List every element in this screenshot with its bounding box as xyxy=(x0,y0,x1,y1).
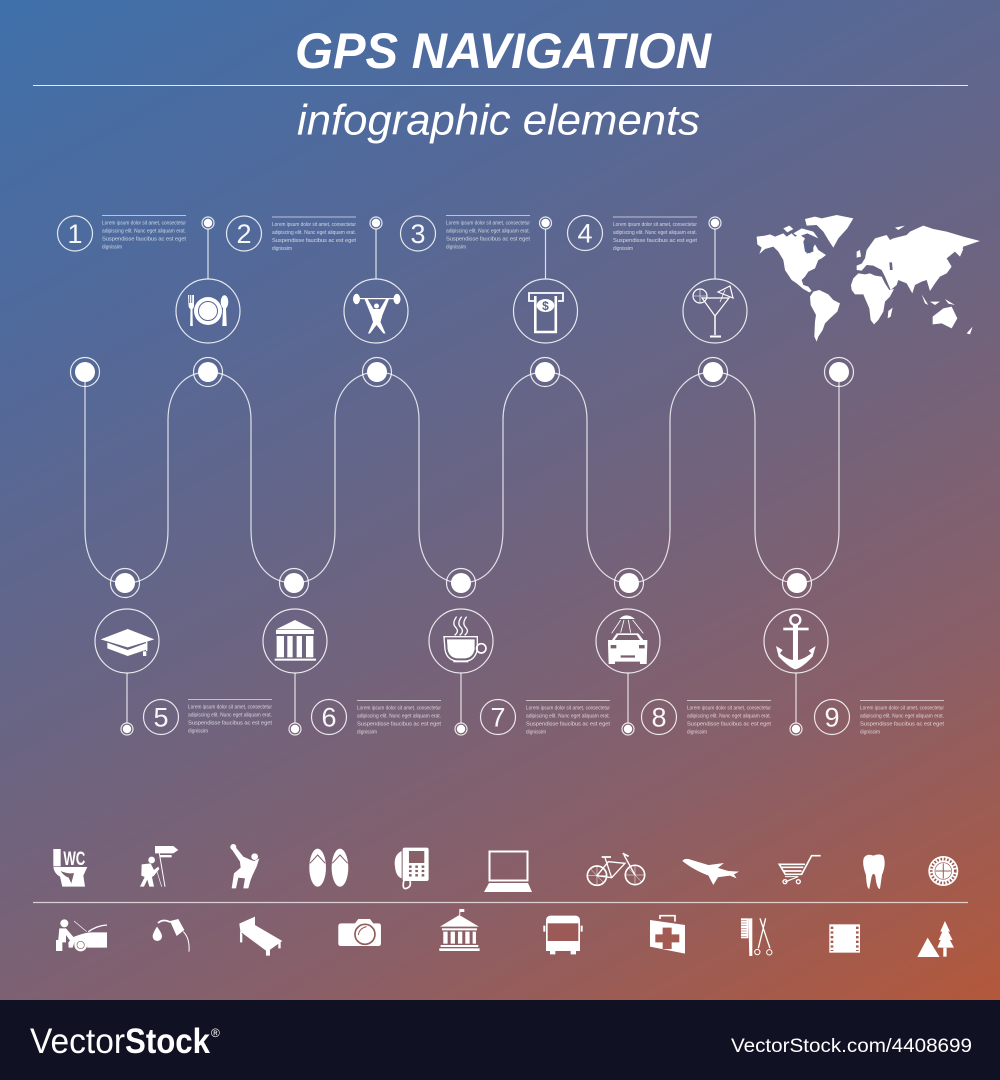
icon: first aid kit xyxy=(650,916,685,954)
connector: weights xyxy=(344,217,408,343)
step 6 text: Suspendisse faucibus ac est eget xyxy=(357,722,441,728)
step 8 number xyxy=(642,700,676,734)
icon: WC toilet xyxy=(53,849,87,887)
step 9 text: Suspendisse faucibus ac est eget xyxy=(860,722,944,728)
icon: comb and scissors xyxy=(741,918,772,956)
route nodes xyxy=(70,358,854,598)
connector: anchor xyxy=(764,609,828,735)
step 4 number xyxy=(568,216,602,250)
icon: atm cash: $ xyxy=(542,299,549,313)
icon: coffee cup xyxy=(444,617,486,662)
step 7 number: 7 xyxy=(490,702,506,732)
step 7 text xyxy=(526,700,610,736)
connector: bank xyxy=(263,609,327,735)
step 4 text: dignissim xyxy=(613,246,633,252)
step 4 text: Lorem ipsum dolor sit amet, consectetur xyxy=(613,222,697,228)
step 2 text xyxy=(272,217,356,252)
route line xyxy=(85,372,839,583)
step 4 text: adipiscing elit. Nunc eget aliquam erat. xyxy=(613,230,697,236)
icon: bus xyxy=(543,916,583,954)
step 6 text: dignissim xyxy=(357,730,377,736)
step 5 number xyxy=(144,700,178,734)
icon: atm cash xyxy=(529,293,563,332)
step 6 text: adipiscing elit. Nunc eget aliquam erat. xyxy=(357,714,441,720)
step 1 number xyxy=(58,216,92,251)
step 8 text: dignissim xyxy=(687,730,707,736)
step 7 number xyxy=(480,700,516,734)
step 3 text: adipiscing elit. Nunc eget aliquam erat. xyxy=(446,229,530,235)
step 8 text: Suspendisse faucibus ac est eget xyxy=(687,722,771,728)
icon: roulette xyxy=(928,856,958,886)
step 7 text: Suspendisse faucibus ac est eget xyxy=(526,722,610,728)
step 7 text: dignissim xyxy=(526,730,546,736)
logo xyxy=(30,1022,220,1061)
step 9 number xyxy=(814,700,850,734)
step 2 text: Suspendisse faucibus ac est eget xyxy=(272,238,356,244)
step 6 number xyxy=(312,700,346,734)
step 3 number xyxy=(400,216,436,251)
icon: camera xyxy=(338,919,381,946)
world map xyxy=(757,215,980,342)
icon: WC toilet: WC xyxy=(63,849,85,870)
step 5 text: dignissim xyxy=(188,729,208,735)
step 9 text xyxy=(860,700,944,736)
step 1 number: 1 xyxy=(67,219,83,249)
icon: tent and tree xyxy=(917,921,954,957)
logo: ® xyxy=(211,1026,220,1040)
icon: museum building xyxy=(439,909,480,951)
subtitle: infographic elements xyxy=(297,96,700,144)
icon: hiker with signpost xyxy=(140,846,178,887)
image id: VectorStock.com/4408699 xyxy=(731,1036,972,1057)
step 5 number: 5 xyxy=(153,702,169,732)
connector: cocktail xyxy=(683,217,747,343)
step 1 text: adipiscing elit. Nunc eget aliquam erat. xyxy=(102,229,186,235)
logo: Stock xyxy=(125,1022,210,1061)
icon: car mechanic xyxy=(56,919,107,951)
icon: fuel nozzle xyxy=(153,919,189,952)
step 5 text xyxy=(188,700,272,735)
icon: laptop xyxy=(484,852,532,892)
icon: discus thrower xyxy=(230,844,259,888)
step 5 text: adipiscing elit. Nunc eget aliquam erat. xyxy=(188,713,272,719)
connector: plate xyxy=(176,217,240,343)
logo: Vector xyxy=(30,1022,125,1061)
step 9 text: Lorem ipsum dolor sit amet, consectetur xyxy=(860,706,944,712)
icon: cocktail xyxy=(693,286,733,336)
step 7 text: Lorem ipsum dolor sit amet, consectetur xyxy=(526,706,610,712)
step 2 text: dignissim xyxy=(272,246,292,252)
step 3 text: Lorem ipsum dolor sit amet, consectetur xyxy=(446,221,530,227)
icon: bed xyxy=(239,917,282,956)
step 9 text: dignissim xyxy=(860,730,880,736)
icon: bicycle xyxy=(587,853,645,885)
step 6 text: Lorem ipsum dolor sit amet, consectetur xyxy=(357,706,441,712)
step 9 number: 9 xyxy=(824,702,840,732)
step 6 number: 6 xyxy=(321,702,337,732)
step 8 text xyxy=(687,700,771,736)
icon: car wash xyxy=(608,615,647,664)
step 3 text xyxy=(446,216,530,251)
icon: anchor xyxy=(776,615,816,669)
footer band xyxy=(0,1000,1000,1080)
connector: coffee xyxy=(429,609,493,735)
step 4 text xyxy=(613,217,697,252)
step 8 text: adipiscing elit. Nunc eget aliquam erat. xyxy=(687,714,771,720)
step 4 text: Suspendisse faucibus ac est eget xyxy=(613,238,697,244)
icon: plate and cutlery xyxy=(188,295,228,326)
step 4 number: 4 xyxy=(577,218,593,248)
title: GPS NAVIGATION xyxy=(295,23,712,79)
step 1 text: Lorem ipsum dolor sit amet, consectetur xyxy=(102,221,186,227)
step 8 text: Lorem ipsum dolor sit amet, consectetur xyxy=(687,706,771,712)
icon: airplane xyxy=(682,859,739,885)
step 1 text: dignissim xyxy=(102,245,122,251)
icon: bank xyxy=(275,620,316,661)
step 3 number: 3 xyxy=(410,219,426,249)
connector: car wash xyxy=(596,609,660,735)
icon: flip flops xyxy=(309,849,348,887)
icon: weightlifter xyxy=(353,294,400,334)
connector: grad cap xyxy=(95,609,159,735)
step 2 number: 2 xyxy=(236,219,252,249)
step 1 text xyxy=(102,216,186,251)
icon: film strip xyxy=(829,924,860,953)
step 8 number: 8 xyxy=(651,702,667,732)
step 5 text: Lorem ipsum dolor sit amet, consectetur xyxy=(188,705,272,711)
icon: shopping cart xyxy=(779,856,821,884)
step 5 text: Suspendisse faucibus ac est eget xyxy=(188,721,272,727)
step 3 text: dignissim xyxy=(446,245,466,251)
step 7 text: adipiscing elit. Nunc eget aliquam erat. xyxy=(526,714,610,720)
icon: tooth xyxy=(863,854,885,889)
step 1 text: Suspendisse faucibus ac est eget xyxy=(102,237,186,243)
step 3 text: Suspendisse faucibus ac est eget xyxy=(446,237,530,243)
step 2 text: adipiscing elit. Nunc eget aliquam erat. xyxy=(272,230,356,236)
icon: telephone xyxy=(395,848,429,889)
connector: atm xyxy=(514,217,578,343)
step 6 text xyxy=(357,700,441,736)
step 2 number xyxy=(226,216,262,251)
icon: graduation cap xyxy=(101,629,154,656)
step 2 text: Lorem ipsum dolor sit amet, consectetur xyxy=(272,222,356,228)
step 9 text: adipiscing elit. Nunc eget aliquam erat. xyxy=(860,714,944,720)
